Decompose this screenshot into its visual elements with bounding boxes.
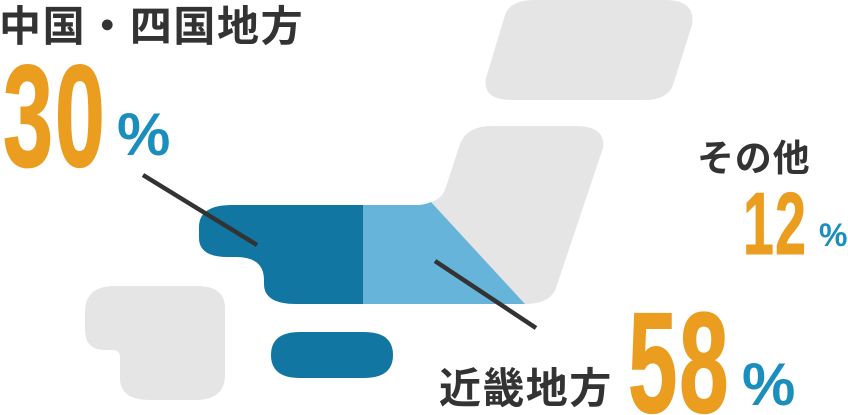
- heading: Chugoku-Shikoku: 中国・四国地方: [0, 3, 304, 50]
- leader line: Kinki: [435, 261, 536, 328]
- value: 30: 30: [3, 35, 107, 197]
- heading: Kinki: 近畿地方: [439, 365, 613, 412]
- leader line: Chugoku-Shikoku: [143, 175, 257, 245]
- map region: Chugoku (dark blue): [199, 205, 363, 304]
- value: 12: 12: [743, 174, 807, 273]
- unit: percent: %: [117, 101, 170, 168]
- heading: others: その他: [697, 138, 810, 179]
- unit: percent: %: [819, 217, 847, 253]
- map region: Kyushu (grey): [85, 286, 225, 400]
- map region: Shikoku (dark blue): [271, 332, 393, 378]
- map region: Hokkaido (grey): [486, 0, 692, 100]
- map region: eastern Japan (grey): [431, 126, 603, 304]
- map region: Kinki (light blue): [363, 202, 525, 304]
